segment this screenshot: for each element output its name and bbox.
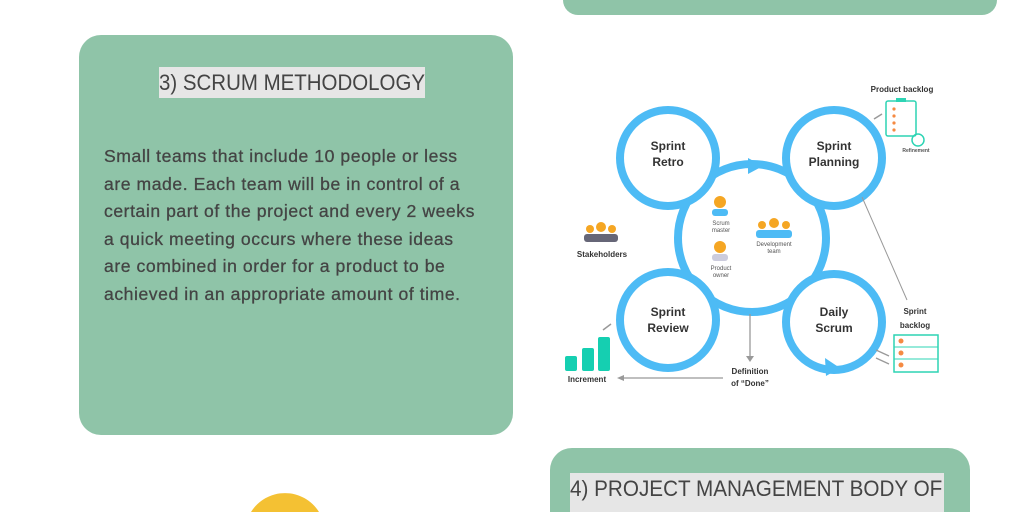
chart: scrum cycle diagram: Retro <box>652 155 684 169</box>
icon: sprint backlog <box>876 307 938 372</box>
icon: increment bars: Increment <box>568 375 606 384</box>
heading: 3) SCRUM METHODOLOGY <box>159 70 425 95</box>
icon: people labels: Development <box>756 242 792 248</box>
icon: people labels: team <box>767 249 781 255</box>
arrow: definition of done: of “Done” <box>731 379 769 388</box>
text block <box>104 146 475 304</box>
chart: scrum cycle diagram: Review <box>647 321 689 335</box>
chart: scrum cycle diagram: Scrum <box>815 321 853 335</box>
heading: 4) PROJECT MANAGEMENT BODY OF <box>570 476 942 501</box>
icon: yellow circle <box>251 493 319 512</box>
text block: achieved in an appropriate amount of time. <box>104 284 461 304</box>
text block: certain part of the project and every 2 weeks <box>104 201 475 221</box>
chart: scrum cycle diagram: Sprint <box>651 139 685 153</box>
arrow: planning to sprint backlog <box>862 197 907 300</box>
icon: people labels <box>577 196 792 279</box>
arrow: definition of done: Definition <box>732 367 769 376</box>
arrow: definition of done <box>617 314 769 388</box>
chart: scrum cycle diagram: Sprint <box>817 139 851 153</box>
icon: product backlog: Product backlog <box>871 85 933 94</box>
icon: product backlog: Refinement <box>902 148 930 154</box>
text block: a quick meeting occurs where these ideas <box>104 229 454 249</box>
heading <box>570 473 944 512</box>
chart: scrum cycle diagram: Daily <box>820 305 849 319</box>
icon: product backlog <box>871 85 933 154</box>
text block: are made. Each team will be in control of a <box>104 174 460 194</box>
text block: are combined in order for a product to be <box>104 256 445 276</box>
icon: sprint backlog: Sprint <box>903 307 927 316</box>
icon: increment bars <box>565 324 611 384</box>
icon: people labels: owner <box>713 273 729 279</box>
panel: PMBOK <box>550 448 970 512</box>
chart: scrum cycle diagram: Planning <box>809 155 859 169</box>
text block: Small teams that include 10 people or less <box>104 146 458 166</box>
icon: people labels: master <box>712 228 730 234</box>
panel: top (partial) <box>563 0 997 15</box>
icon: people labels: Stakeholders <box>577 250 628 259</box>
icon: people labels: Scrum <box>712 221 730 227</box>
chart: scrum cycle diagram: Sprint <box>651 305 685 319</box>
icon: sprint backlog: backlog <box>900 321 930 330</box>
icon: people labels: Product <box>711 266 732 272</box>
panel: scrum methodology <box>79 35 513 435</box>
